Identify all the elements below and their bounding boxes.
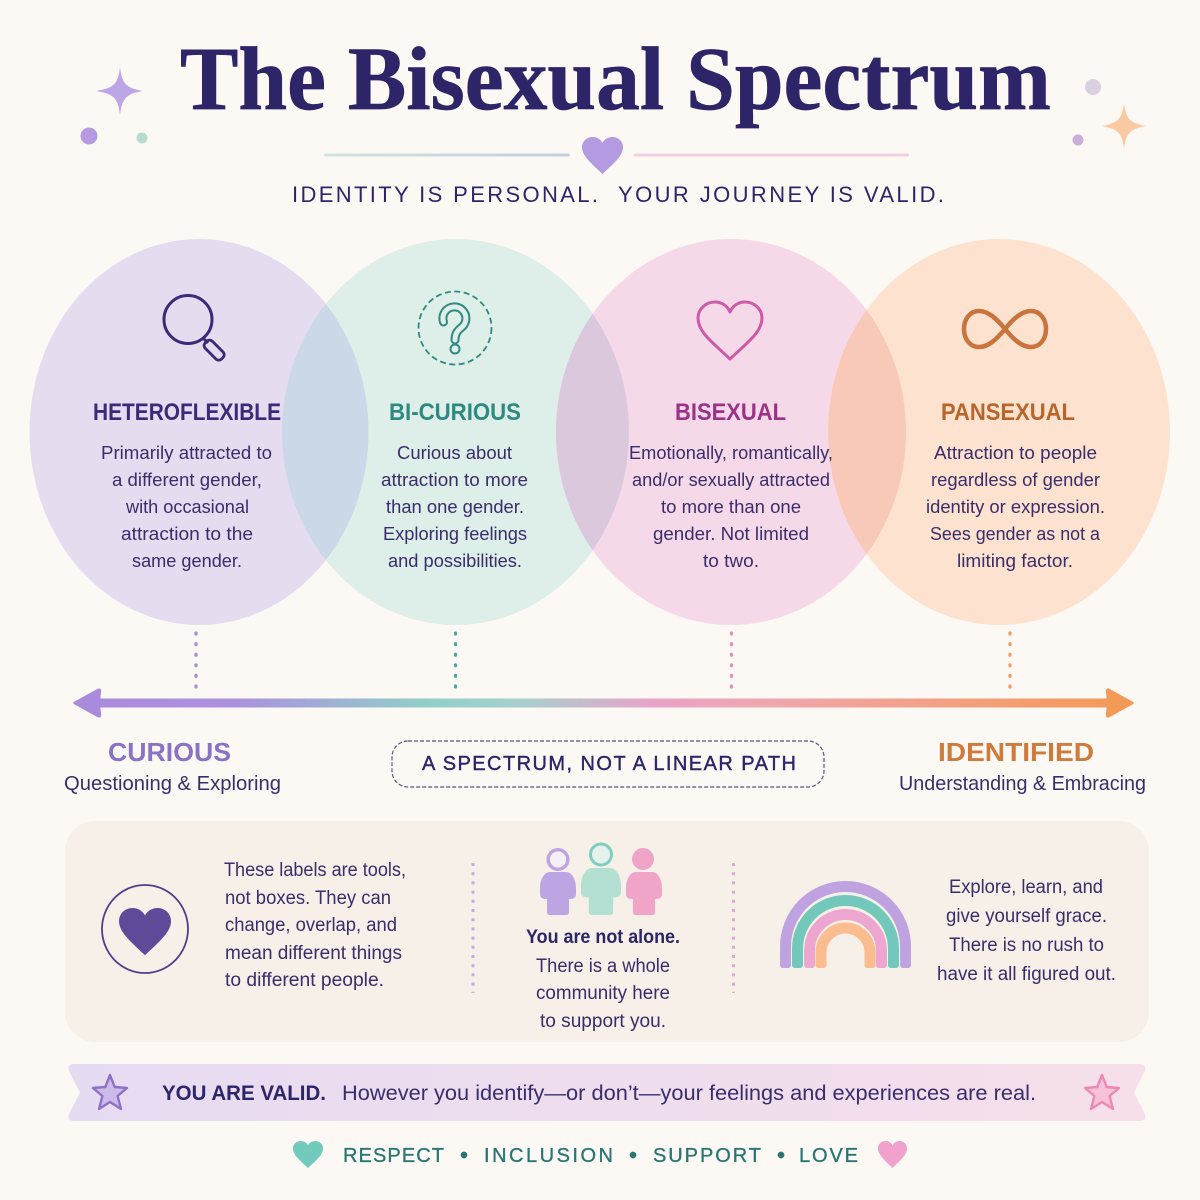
- dotted connectors: [196, 633, 1010, 689]
- text: explore and learn: have it all figured out.: [937, 964, 1116, 985]
- text: bi-curious description: attraction to more: [381, 469, 528, 490]
- label: identified: [899, 737, 1146, 795]
- text: heteroflexible description: Primarily attracted to: [101, 442, 272, 463]
- text: heteroflexible description: a different gender,: [112, 469, 262, 490]
- text: pansexual description: Sees gender as not a: [930, 523, 1101, 544]
- text: bi-curious description: Curious about: [397, 442, 512, 463]
- header: [80, 30, 1146, 207]
- text: bisexual description: to more than one: [661, 496, 801, 517]
- icon: pink heart: [878, 1141, 907, 1168]
- text: bisexual description: [629, 442, 833, 571]
- panel: reassurance messages: [65, 821, 1149, 1042]
- text: bi-curious description: [381, 442, 528, 571]
- subtitle: YOUR JOURNEY IS VALID.: [618, 182, 944, 207]
- subtitle: [292, 182, 944, 207]
- text: labels are tools: not boxes. They can: [225, 888, 391, 909]
- text: pansexual description: [926, 442, 1105, 571]
- text: heteroflexible description: attraction to the: [121, 523, 253, 544]
- text: you are not alone: community here: [536, 983, 670, 1004]
- text: labels are tools: change, overlap, and: [225, 915, 397, 936]
- text: bi-curious description: Exploring feelings: [383, 523, 527, 544]
- heading: pansexual: PANSEXUAL: [941, 399, 1075, 426]
- heading: bisexual: BISEXUAL: [675, 399, 786, 426]
- panel: bi-curious: [381, 292, 528, 571]
- icon: rainbow: [780, 887, 911, 968]
- icon: lavender star: [93, 1075, 127, 1109]
- spectrum arrow: [74, 690, 1132, 716]
- footer values: [293, 1141, 907, 1168]
- label: identified: Understanding & Embracing: [899, 773, 1146, 795]
- text: explore and learn: There is no rush to: [949, 935, 1104, 956]
- callout: a spectrum, not a linear path: [392, 741, 824, 787]
- subtitle: IDENTITY IS PERSONAL.: [292, 182, 598, 207]
- label: curious: Questioning & Exploring: [64, 773, 281, 795]
- text: bisexual description: and/or sexually attracted: [632, 469, 830, 490]
- text: pansexual description: limiting factor.: [957, 550, 1073, 571]
- icon: orange sparkle with dots: [1072, 79, 1146, 149]
- text: you are not alone: You are not alone.: [526, 927, 680, 948]
- icon: three people: [540, 844, 662, 915]
- icon: magnifying glass: [164, 296, 226, 362]
- text: heteroflexible description: [101, 442, 272, 571]
- panel: bisexual: [629, 302, 833, 571]
- footer words: SUPPORT: [653, 1145, 761, 1167]
- text: however you identify: However you identify—or don’t—your feelings and experiences are real.: [342, 1082, 1036, 1105]
- text: labels are tools: mean different things: [225, 943, 402, 964]
- text: explore and learn: Explore, learn, and: [949, 877, 1103, 898]
- icon: teal heart: [293, 1141, 323, 1168]
- text: bisexual description: to two.: [703, 550, 759, 571]
- panel: pansexual: [926, 311, 1105, 571]
- text: bi-curious description: and possibilities.: [388, 550, 522, 571]
- panel: heteroflexible: [93, 296, 281, 571]
- heading: heteroflexible: HETEROFLEXIBLE: [93, 399, 281, 426]
- text: you are valid: YOU ARE VALID.: [162, 1082, 326, 1105]
- callout: a spectrum, not a linear path: A SPECTRUM, NOT A LINEAR PATH: [422, 753, 796, 775]
- text: labels are tools: [224, 860, 406, 991]
- title: The Bisexual Spectrum: [180, 30, 1051, 129]
- icon: heart in circle: [102, 885, 188, 973]
- footer words: LOVE: [799, 1145, 858, 1167]
- icon: infinity: [964, 311, 1046, 347]
- heading: bi-curious: BI-CURIOUS: [389, 399, 521, 426]
- text: labels are tools: These labels are tools,: [224, 860, 406, 881]
- text: you are not alone: There is a whole: [536, 956, 670, 977]
- icon: pink star: [1085, 1075, 1119, 1109]
- text: explore and learn: give yourself grace.: [946, 906, 1107, 927]
- text: heteroflexible description: with occasional: [125, 496, 249, 517]
- text: heteroflexible description: same gender.: [132, 550, 242, 571]
- footer words: [343, 1145, 858, 1167]
- footer words: INCLUSION: [484, 1145, 613, 1167]
- panel dividers: [473, 863, 734, 993]
- icon: question mark in dashed circle: [418, 292, 492, 364]
- footer words: RESPECT: [343, 1145, 444, 1167]
- banner: you are valid: [69, 1064, 1145, 1121]
- heart divider: [324, 137, 909, 174]
- venn circles: [30, 239, 1170, 625]
- text: bisexual description: Emotionally, romantically,: [629, 442, 833, 463]
- icon: outline heart: [698, 302, 762, 359]
- text: pansexual description: Attraction to people: [934, 442, 1097, 463]
- text: pansexual description: regardless of gender: [931, 469, 1100, 490]
- label: curious: [64, 737, 281, 795]
- icon: lavender sparkle with dots: [80, 67, 148, 144]
- text: bisexual description: gender. Not limited: [653, 523, 809, 544]
- text: you are not alone: to support you.: [540, 1011, 666, 1032]
- text: you are not alone: [526, 927, 680, 1032]
- text: pansexual description: identity or expression.: [926, 496, 1105, 517]
- text: bi-curious description: than one gender.: [386, 496, 524, 517]
- text: labels are tools: to different people.: [225, 970, 384, 991]
- text: explore and learn: [937, 877, 1116, 985]
- label: curious: CURIOUS: [108, 737, 231, 767]
- label: identified: IDENTIFIED: [938, 737, 1094, 767]
